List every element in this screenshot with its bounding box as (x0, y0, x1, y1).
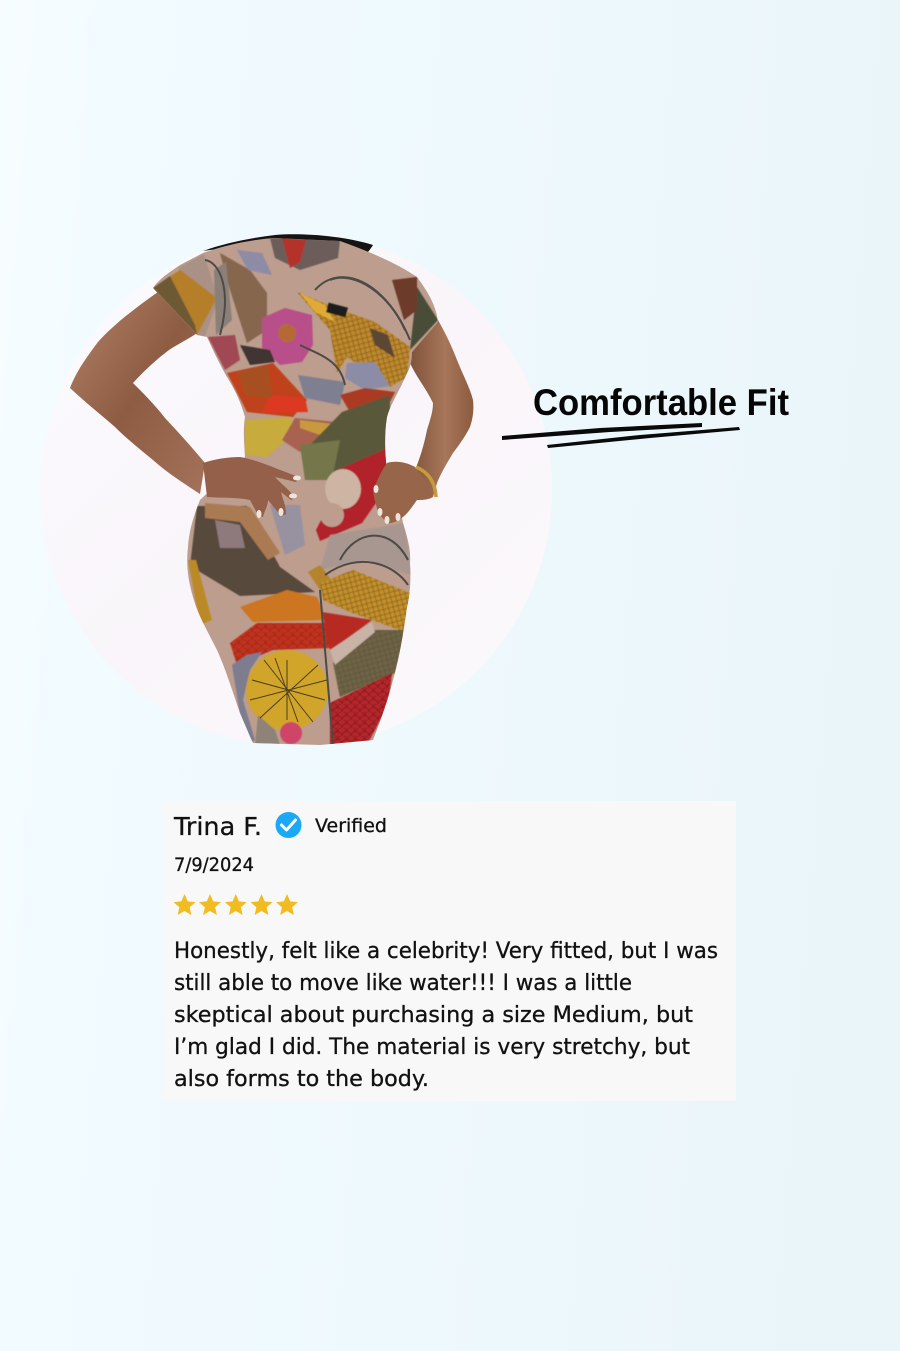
review text (174, 938, 718, 1092)
icon: verified badge (276, 812, 302, 838)
review text: still able to move like water!!! I was a little (174, 970, 632, 996)
star rating (174, 894, 298, 915)
review text: skeptical about purchasing a size Medium, but (174, 1002, 693, 1028)
peony flower (262, 308, 313, 365)
review date: 7/9/2024 (174, 855, 254, 876)
hip dragon (190, 506, 315, 596)
red koi belly (316, 447, 390, 541)
olive scales (333, 630, 405, 697)
sleeves and shoulder print (170, 269, 216, 335)
right hand fingers over bodysuit (373, 462, 433, 523)
mid orange and red koi (227, 363, 307, 417)
yellow flower waist (245, 417, 297, 457)
background circle (40, 234, 552, 746)
right arm (410, 320, 473, 497)
gold koi thigh (320, 570, 410, 632)
orange flower and thigh (240, 590, 327, 622)
curved print lines (205, 260, 410, 745)
gold koi top (297, 292, 410, 387)
heading: Comfortable Fit: Comfortable Fit (533, 382, 789, 423)
bracelet (416, 467, 436, 497)
reviewer name: Trina F. (173, 812, 262, 841)
figure: model in printed bodysuit (70, 230, 473, 750)
hair (203, 234, 373, 258)
hand-drawn underlines (502, 423, 740, 448)
review text: Honestly, felt like a celebrity! Very fitted, but I was (174, 938, 718, 964)
large yellow flower (246, 650, 328, 730)
review text: also forms to the body. (174, 1066, 429, 1092)
bodysuit with koi and dragon print (150, 230, 450, 750)
left arm (70, 292, 205, 494)
panel: customer review (164, 801, 736, 1101)
review text: I’m glad I did. The material is very stretchy, but (174, 1034, 690, 1060)
red scales (330, 673, 392, 745)
nails (256, 476, 400, 524)
left hand fingers over bodysuit (203, 457, 300, 517)
green dark waist print (311, 394, 390, 472)
verified label: Verified (315, 815, 387, 837)
